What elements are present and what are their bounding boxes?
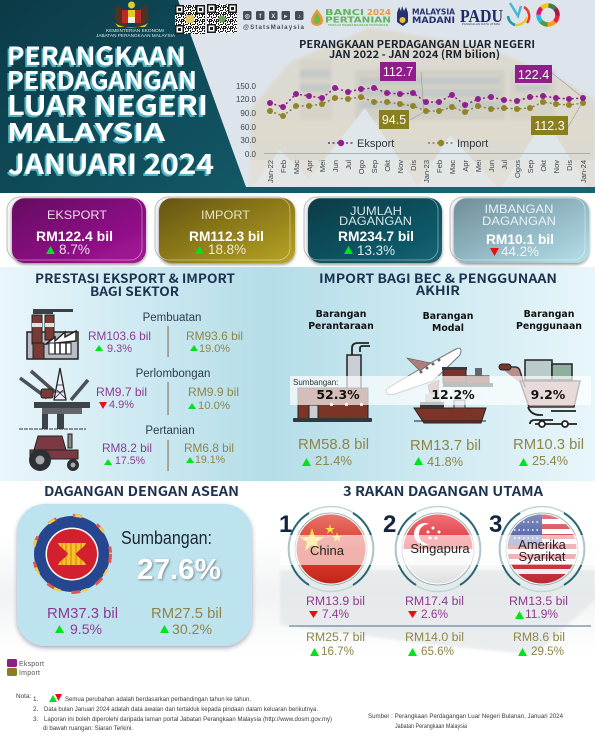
text: pertanian: Pertanian [145, 425, 195, 437]
import values by partner: RM14.0 bil [405, 630, 464, 644]
KPI card: eksport: EKSPORT [47, 208, 108, 222]
icon: airplane [386, 348, 461, 403]
footnotes: Laporan ini boleh diperolehi daripada laman portal Jabatan Perangkaan Malaysia (http://www.dosm.gov.my) [44, 716, 332, 723]
social media icons and handle: ◎ [245, 14, 251, 20]
line chart: eksport and import: Jun [487, 160, 496, 172]
footnotes [16, 693, 332, 732]
callout: 112.7: 112.7 [383, 65, 413, 79]
line chart: eksport and import: Jan-24 [579, 160, 588, 183]
legend: eksport and import [7, 659, 44, 677]
country name band: China [310, 543, 345, 558]
PADU logo: PANGKALAN DATA UTAMA [462, 22, 500, 26]
line chart: eksport and import: Ogos [513, 160, 522, 178]
line chart: eksport and import: Jan-22 [266, 160, 275, 183]
text: pembuatan: 19.0% [199, 343, 230, 355]
country name band [280, 535, 595, 565]
line chart: eksport and import: Mei [318, 160, 327, 172]
line chart: eksport and import: Ogo [357, 160, 366, 174]
export values by partner: 2.6% [421, 607, 448, 621]
text: 27.6 percent: 27.6% [137, 554, 221, 586]
line chart: eksport and import: Feb [435, 160, 444, 173]
Banci Pertanian logo: TERAJU PEMBANGUNAN PERTANIAN [328, 23, 388, 27]
main title [5, 37, 214, 185]
export values by partner: RM17.4 bil [405, 594, 464, 608]
social media icons and handle [243, 11, 305, 31]
source note: Sumber : Perangkaan Perdagangan Luar Negeri Bulanan, Januari 2024 [368, 713, 563, 720]
footnotes: di bawah ruangan: Siaran Terkini. [43, 725, 133, 732]
lower background: faded port photograph [0, 535, 595, 655]
line chart: eksport and import [236, 62, 590, 183]
text: pertanian [102, 425, 234, 471]
heading: import BEC: AKHIR [415, 280, 460, 299]
contribution band: 9.2% [531, 387, 566, 402]
category labels: Barangan [423, 311, 473, 322]
import values [298, 437, 584, 469]
chart title [299, 37, 535, 62]
import values by partner: RM25.7 bil [306, 630, 365, 644]
heading: prestasi sektor: BAGI SEKTOR [90, 281, 180, 300]
line chart: eksport and import: Jun [331, 160, 340, 172]
Malaysia Madani logo: MADANI [412, 16, 455, 26]
QR codes [175, 4, 237, 34]
text: perlombongan: 10.0% [198, 400, 230, 412]
import values: RM58.8 bil [298, 437, 369, 453]
category labels: Perantaraan [308, 321, 374, 332]
callout: 112.3: 112.3 [534, 119, 565, 133]
import values: RM13.7 bil [410, 438, 481, 454]
KPI card: jumlah dagangan: 13.3% [357, 242, 395, 258]
line chart: eksport and import: Nov [552, 160, 561, 173]
Banci Pertanian logo: 2024 [367, 8, 391, 17]
ministry name: JABATAN PERANGKAAN MALAYSIA [96, 33, 176, 38]
import values: 21.4% [315, 453, 352, 468]
line chart: eksport and import: Mei [474, 160, 483, 172]
legend: eksport and import: Eksport [19, 661, 44, 668]
category labels: Penggunaan [516, 321, 582, 332]
KPI card: eksport: RM122.4 bil [36, 228, 113, 244]
flag: United States [500, 506, 584, 592]
footnotes: 3. [33, 716, 39, 723]
line chart: eksport and import: Sep [370, 160, 379, 173]
line chart: eksport and import: Apr [461, 159, 470, 172]
line chart: eksport and import: Sep [526, 160, 535, 173]
text: ASEAN values: RM27.5 bil [151, 606, 222, 622]
header chart background: building photograph [170, 0, 595, 190]
social media icons and handle: X [271, 14, 275, 20]
KPI card: jumlah dagangan [304, 197, 442, 263]
header teal title panel [0, 0, 595, 193]
line chart: eksport and import: 60.0 [240, 123, 257, 132]
contribution band [290, 376, 591, 405]
social media icons and handle: @StatsMalaysia [243, 24, 305, 31]
text: perlombongan: RM9.9 bil [188, 385, 239, 399]
main title: PERDAGANGAN [5, 63, 195, 98]
country name band: Syarikat [519, 549, 566, 564]
panel: prestasi eksport & import bagi sektor [0, 267, 269, 481]
footnotes: Nota: [16, 693, 31, 700]
callout: 112.7 [380, 62, 416, 81]
Malaysia Madani logo: MALAYSIA [412, 8, 455, 16]
line chart: eksport and import: Okt [539, 159, 548, 172]
PADU logo: PADU [460, 6, 503, 26]
line chart: eksport and import: Okt [383, 159, 392, 172]
rank numbers: 1 [279, 511, 292, 538]
main title: MALAYSIA [5, 116, 164, 151]
KPI card: import: RM112.3 bil [189, 228, 264, 244]
chart legend [328, 138, 488, 150]
source note: Jabatan Perangkaan Malaysia [395, 723, 467, 730]
export values by partner: 7.4% [322, 607, 349, 621]
KPI card: imbangan dagangan: 44.2% [501, 243, 539, 259]
category labels: Barangan [316, 309, 366, 320]
circular campaign logo [508, 3, 529, 25]
export values by partner: 11.9% [525, 607, 558, 621]
import values: RM10.3 bil [513, 437, 584, 453]
social media icons and handle: ♪ [298, 14, 301, 20]
category labels: Barangan [524, 309, 574, 320]
callout: 122.4 [515, 65, 552, 83]
text: pertanian: RM8.2 bil [102, 441, 152, 455]
KPI card: imbangan dagangan: RM10.1 bil [486, 231, 554, 247]
text: ASEAN values [47, 606, 222, 637]
chart title: JAN 2022 - JAN 2024 (RM bilion) [329, 47, 500, 62]
panel: dagangan dengan ASEAN [17, 480, 252, 646]
ministry name [96, 28, 176, 38]
line chart: eksport and import: 150.0 [236, 82, 257, 91]
KPI card: jumlah dagangan: DAGANGAN [339, 214, 412, 228]
flag: China [288, 506, 374, 592]
ministry crest [114, 2, 149, 28]
main title: LUAR NEGERI [5, 86, 206, 125]
category labels: Modal [432, 323, 464, 334]
import values by partner: 16.7% [321, 644, 354, 658]
Malaysia Madani logo [397, 6, 455, 26]
main title: JANUARI 2024 [6, 145, 212, 185]
KPI card: import: 18.8% [208, 241, 246, 257]
icon: shopping cart [499, 360, 580, 427]
source note [368, 713, 563, 730]
social media icons and handle: ▸ [283, 14, 288, 20]
text: ASEAN values: 9.5% [70, 621, 102, 637]
main title: PERDAGANGAN [7, 61, 197, 96]
rank numbers: 3 [489, 511, 502, 538]
ministry name: KEMENTERIAN EKONOMI [106, 28, 164, 33]
icon: industrial plant [293, 343, 372, 422]
text: pertanian: RM6.8 bil [184, 441, 234, 455]
main title: PERANGKAAN [7, 37, 186, 73]
KPI card: imbangan dagangan: DAGANGAN [482, 214, 556, 228]
text: sumbangan: Sumbangan: [121, 528, 212, 548]
panel: import bagi BEC & penggunaan akhir [269, 267, 595, 481]
footnotes: Semua perubahan adalah berdasarkan perbandingan tahun ke tahun. [65, 696, 251, 703]
rank numbers: 2 [383, 511, 396, 538]
text: ASEAN values: RM37.3 bil [47, 606, 118, 622]
heading: ASEAN: DAGANGAN DENGAN ASEAN [44, 480, 239, 500]
callout: 112.3 [531, 116, 568, 135]
Banci Pertanian logo [311, 8, 391, 27]
legend: eksport and import: Import [19, 670, 40, 677]
heading: import BEC: IMPORT BAGI BEC & PENGGUNAAN [319, 268, 557, 287]
text: pertanian: 17.5% [115, 455, 145, 467]
KPI card: import: IMPORT [201, 208, 251, 222]
text: pembuatan: Pembuatan [143, 312, 201, 324]
text: perlombongan: Perlombongan [136, 368, 210, 380]
export values by partner [306, 594, 568, 621]
chart title: PERANGKAAN PERDAGANGAN LUAR NEGERI [299, 37, 535, 52]
callout: 94.5 [379, 110, 409, 129]
KPI card: eksport: 8.7% [59, 241, 90, 257]
import values by partner: 29.5% [531, 644, 564, 658]
heading: rakan dagangan: 3 RAKAN DAGANGAN UTAMA [343, 480, 543, 500]
KPI card: eksport [7, 197, 146, 263]
text: pertanian: 19.1% [195, 454, 225, 466]
text: perlombongan: RM9.7 bil [96, 385, 147, 399]
contribution band: 52.3% [316, 387, 360, 402]
chart legend: Import [457, 138, 488, 150]
Banci Pertanian logo: PERTANIAN [325, 16, 391, 24]
heading: prestasi sektor [35, 268, 235, 300]
import values by partner [306, 630, 565, 658]
icon: oil rig [19, 368, 90, 429]
line chart: eksport and import: Apr [305, 159, 314, 172]
callout: 94.5: 94.5 [382, 113, 406, 127]
panel: 3 rakan dagangan utama [279, 480, 595, 658]
icon: cargo ship [414, 394, 486, 423]
text: perlombongan [96, 368, 239, 415]
text: pembuatan: RM93.6 bil [186, 329, 243, 343]
main title: PERANGKAAN [5, 39, 184, 75]
footnotes: 2. [33, 706, 39, 713]
flag: Singapore [396, 506, 480, 592]
SDG wheel logo [538, 6, 558, 24]
import values: 25.4% [532, 453, 568, 468]
category labels [308, 309, 582, 334]
KPI card: jumlah dagangan: JUMLAH [350, 204, 402, 218]
text: pembuatan [88, 312, 243, 357]
icon: tractor [29, 434, 79, 471]
line chart: eksport and import: Nov [396, 160, 405, 173]
text: perlombongan: 4.9% [109, 399, 134, 411]
card: ASEAN [17, 504, 252, 646]
line chart: eksport and import: 0.0 [245, 150, 257, 159]
line chart: eksport and import: Dis [409, 160, 418, 171]
text: ASEAN values: 30.2% [172, 621, 212, 637]
contribution band: 12.2% [431, 387, 475, 402]
KPI card: jumlah dagangan: RM234.7 bil [338, 228, 414, 244]
main title: JANUARI 2024 [8, 143, 214, 183]
line chart: eksport and import: Mac [448, 160, 457, 174]
line chart: eksport and import: Jan-23 [422, 160, 431, 183]
line chart: eksport and import: Mac [292, 160, 301, 174]
footnotes: Data bulan Januari 2024 adalah data awalan dan tertakluk kepada pindaan dalam keluaran berikutnya. [44, 706, 318, 713]
social media icons and handle: f [259, 14, 262, 20]
heading: import BEC [319, 268, 557, 299]
text: pembuatan: RM103.6 bil [88, 329, 151, 343]
line chart: eksport and import: Feb [279, 160, 288, 173]
heading: prestasi sektor: PRESTASI EKSPORT & IMPORT [35, 268, 235, 287]
footnotes: 1. [33, 696, 39, 703]
contribution band: Sumbangan: [293, 378, 338, 387]
icon: ASEAN emblem [34, 516, 110, 592]
line chart: eksport and import: 30.0 [240, 136, 257, 145]
import values by partner: 65.6% [421, 644, 454, 658]
main title: LUAR NEGERI [7, 84, 208, 123]
import values by partner: RM8.6 bil [513, 630, 565, 644]
KPI card: import [155, 197, 295, 263]
line chart: eksport and import: Jul [344, 160, 353, 170]
Banci Pertanian logo: BANCI [325, 8, 364, 17]
KPI card: imbangan dagangan: IMBANGAN [484, 202, 554, 216]
icon: factory [27, 309, 78, 359]
icon: train [442, 367, 493, 387]
import values: 41.8% [427, 454, 463, 469]
line chart: eksport and import: Jul [500, 160, 509, 170]
line chart: eksport and import: Dis [565, 160, 574, 171]
rank numbers [279, 511, 502, 538]
KPI card: imbangan dagangan [450, 197, 589, 263]
export values by partner: RM13.5 bil [509, 594, 568, 608]
export values by partner: RM13.9 bil [306, 594, 365, 608]
country name band: Singapura [410, 541, 470, 556]
line chart: eksport and import: 90.0 [240, 109, 257, 118]
line chart: eksport and import: 120.0 [236, 95, 257, 104]
main title: MALAYSIA [7, 114, 165, 149]
callout: 122.4: 122.4 [518, 68, 549, 82]
country name band: Amerika [518, 537, 567, 552]
text: pembuatan: 9.3% [107, 343, 132, 355]
chart legend: Eksport [357, 138, 394, 150]
